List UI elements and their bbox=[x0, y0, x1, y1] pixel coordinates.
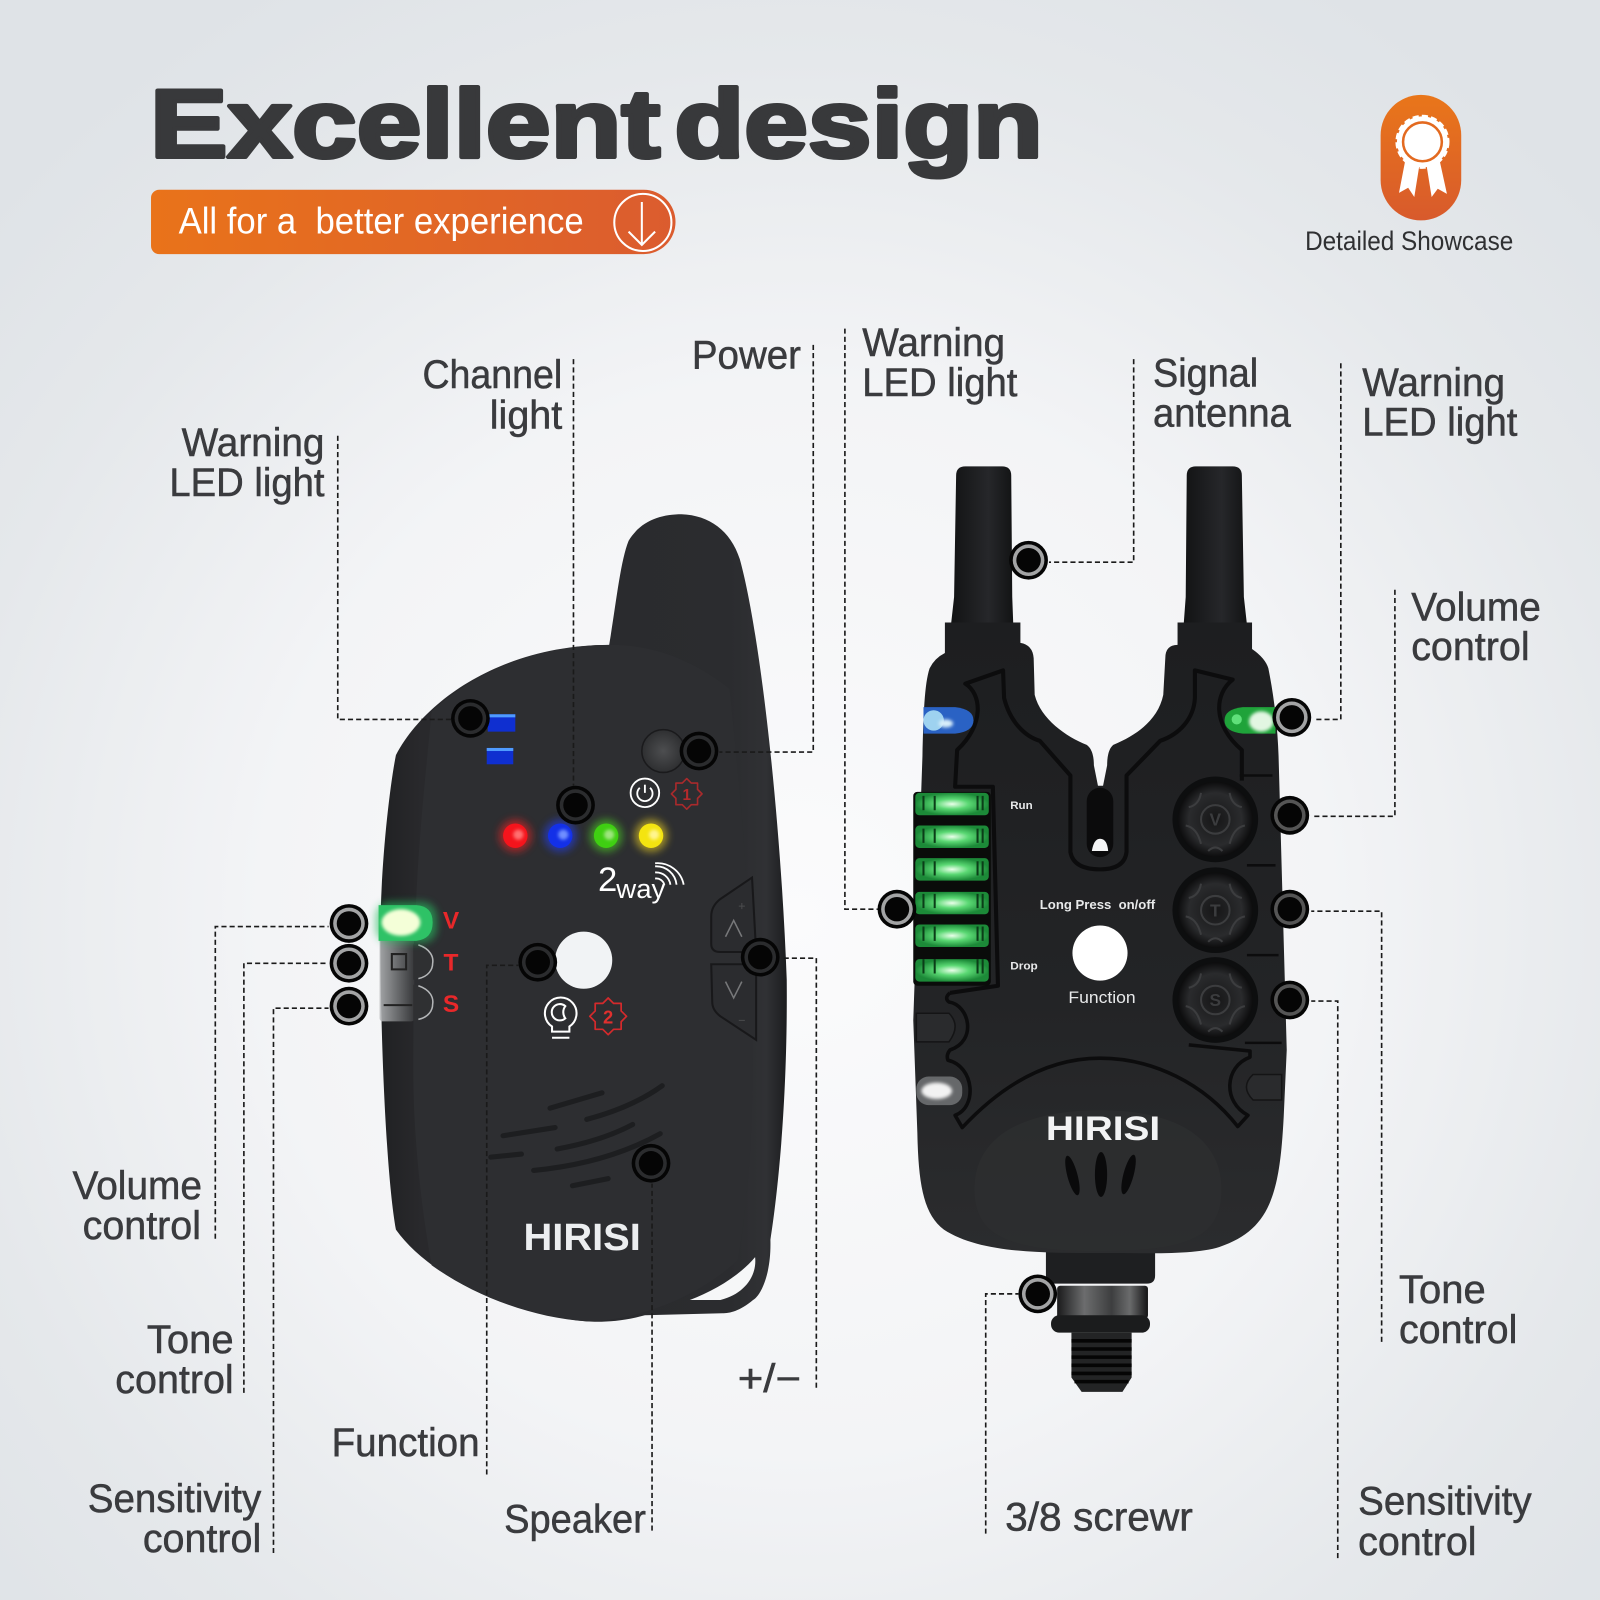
blue warning LEDs bbox=[487, 714, 515, 764]
panel text: Drop bbox=[1010, 960, 1038, 972]
label: tone control (receiver): control bbox=[115, 1358, 234, 1402]
label: channel light bbox=[422, 353, 562, 438]
badge: detailed showcase: Detailed Showcase bbox=[1305, 226, 1513, 256]
2way logo: way bbox=[615, 874, 666, 904]
blue warning LED bbox=[923, 707, 973, 734]
panel text bbox=[1010, 800, 1156, 1007]
side LED strip bbox=[376, 902, 437, 1021]
label: sensitivity control (alarm): Sensitivity bbox=[1358, 1479, 1532, 1523]
knob: tone: T bbox=[1210, 900, 1221, 920]
label: warning LED light (receiver) bbox=[169, 421, 324, 505]
icon: step gear 2: 2 bbox=[603, 1007, 613, 1028]
labels bbox=[72, 321, 1541, 1564]
label: volume control (alarm): Volume bbox=[1411, 585, 1541, 629]
label: volume control (alarm) bbox=[1411, 585, 1541, 669]
knob: sensitivity: S bbox=[1210, 990, 1221, 1010]
speaker bump bbox=[974, 1110, 1221, 1251]
label: warning LED light (receiver): Warning bbox=[182, 421, 324, 465]
label: volume control (receiver) bbox=[72, 1164, 202, 1248]
leader lines bbox=[215, 329, 1395, 1558]
label: function: Function bbox=[332, 1421, 480, 1465]
label: speaker: Speaker bbox=[504, 1498, 646, 1542]
label: tone control (alarm): Tone bbox=[1399, 1268, 1486, 1312]
label: volume control (receiver): control bbox=[83, 1204, 201, 1248]
label: warning LED light (alarm right): LED light bbox=[1362, 401, 1517, 445]
green warning LED bbox=[1224, 707, 1276, 734]
V T S letters: V bbox=[443, 908, 460, 935]
label: tone control (alarm) bbox=[1399, 1268, 1517, 1352]
label: tone control (alarm): control bbox=[1399, 1308, 1517, 1352]
label: signal antenna bbox=[1153, 352, 1292, 436]
knob: volume bbox=[1172, 777, 1258, 862]
V T S letters: S bbox=[443, 991, 459, 1018]
label: tone control (receiver): Tone bbox=[147, 1318, 234, 1362]
label: volume control (alarm): control bbox=[1411, 625, 1530, 669]
inner panel outline bbox=[950, 670, 1242, 993]
panel text: Long Press on/off bbox=[1040, 897, 1156, 912]
clear LED bbox=[916, 1077, 962, 1105]
icon: step gear 1 bbox=[671, 779, 702, 809]
LED bar strip bbox=[913, 792, 991, 986]
panel text: Run bbox=[1010, 800, 1033, 812]
label: sensitivity control (receiver) bbox=[88, 1477, 261, 1561]
label: sensitivity control (receiver): control bbox=[143, 1517, 261, 1561]
alarm function button bbox=[1072, 926, 1128, 981]
2way logo bbox=[598, 861, 684, 904]
antennas bbox=[951, 466, 1247, 624]
label: signal antenna: antenna bbox=[1153, 392, 1292, 436]
receiver front face bbox=[413, 645, 753, 1321]
label: screw: 3/8 screwr bbox=[1005, 1496, 1193, 1540]
icon: step gear 2 bbox=[590, 998, 627, 1035]
icon: power bbox=[631, 779, 659, 807]
alarm body bbox=[913, 622, 1287, 1253]
function button bbox=[555, 932, 612, 989]
label: warning LED light (alarm right) bbox=[1362, 361, 1517, 445]
label: channel light: light bbox=[490, 394, 562, 438]
label: warning LED light (alarm left): Warning bbox=[862, 321, 1005, 365]
title bbox=[150, 69, 1043, 178]
alarm speaker slits bbox=[1062, 1152, 1139, 1197]
receiver logo: HIRISI bbox=[523, 1216, 641, 1258]
icon: step gear 1: 1 bbox=[682, 787, 691, 804]
lower panel outline bbox=[947, 993, 1250, 1128]
label: signal antenna: Signal bbox=[1153, 352, 1258, 396]
threaded screw mount bbox=[1046, 1247, 1155, 1392]
label: warning LED light (alarm right): Warning bbox=[1362, 361, 1505, 405]
icon: lamp bbox=[545, 997, 577, 1038]
alarm logo: HIRISI bbox=[1046, 1110, 1160, 1148]
label: plus minus: +/− bbox=[738, 1357, 801, 1401]
knob dividers bbox=[1240, 776, 1282, 1043]
power button bbox=[642, 730, 685, 772]
label: channel light: Channel bbox=[422, 353, 562, 397]
bite alarm groove bbox=[1087, 788, 1113, 857]
subtitle pill bbox=[151, 190, 676, 254]
label: warning LED light (alarm left) bbox=[862, 321, 1017, 405]
label: sensitivity control (receiver): Sensitivity bbox=[88, 1477, 261, 1521]
subtitle pill: All for a better experience bbox=[179, 201, 584, 242]
title: Excellent bbox=[150, 69, 660, 178]
knob: sensitivity bbox=[1172, 957, 1258, 1043]
badge: detailed showcase bbox=[1305, 95, 1513, 256]
knob: tone bbox=[1172, 867, 1258, 953]
knob: volume: V bbox=[1210, 810, 1222, 830]
channel lights bbox=[499, 819, 667, 852]
callout markers on receiver bbox=[330, 699, 780, 1183]
callout markers on alarm bbox=[878, 541, 1311, 1313]
label: sensitivity control (alarm): control bbox=[1358, 1520, 1477, 1564]
label: sensitivity control (alarm) bbox=[1358, 1479, 1532, 1564]
side bumps bbox=[916, 1013, 1282, 1100]
plus minus buttons bbox=[711, 878, 756, 1040]
receiver silhouette with antenna housing and strap loop bbox=[381, 514, 787, 1322]
V T S letters bbox=[443, 908, 460, 1018]
label: tone control (receiver) bbox=[115, 1318, 234, 1402]
receiver device bbox=[376, 514, 787, 1322]
panel text: Function bbox=[1068, 989, 1136, 1007]
alarm device bbox=[913, 466, 1287, 1392]
title: design bbox=[674, 69, 1043, 178]
V T S letters: T bbox=[444, 949, 459, 976]
strap hole bbox=[690, 1257, 755, 1300]
label: volume control (receiver): Volume bbox=[72, 1164, 202, 1208]
label: warning LED light (alarm left): LED light bbox=[862, 361, 1017, 405]
label: warning LED light (receiver): LED light bbox=[169, 461, 324, 505]
speaker slits bbox=[491, 1086, 662, 1186]
label: power: Power bbox=[692, 333, 801, 377]
2way logo: 2 bbox=[598, 861, 617, 899]
